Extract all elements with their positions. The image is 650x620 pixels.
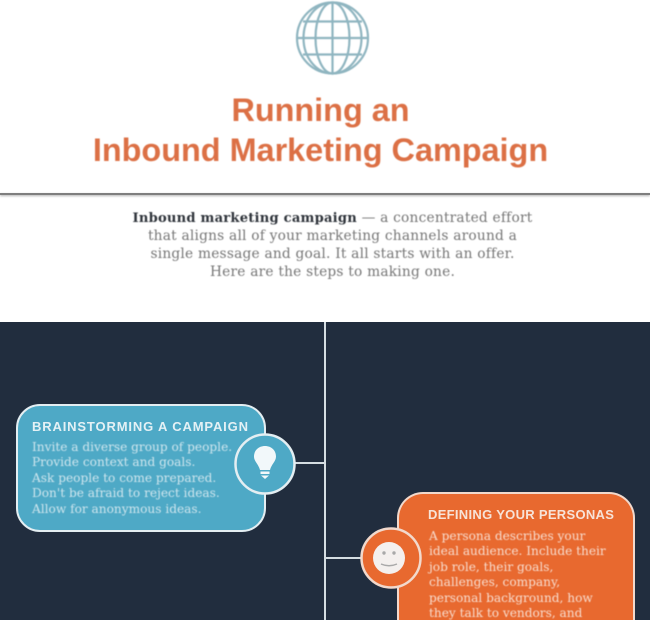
title: Running an: [231, 92, 410, 128]
header divider: [0, 193, 650, 195]
body text: brainstorming: [32, 440, 232, 516]
dark timeline panel: [0, 322, 650, 620]
body text: defining your personas: A persona describes your: [429, 529, 585, 543]
intro text: [132, 210, 533, 280]
heading: brainstorming: BRAINSTORMING A CAMPAIGN: [32, 419, 249, 434]
body text: defining your personas: personal background, how: [429, 591, 593, 605]
body text: defining your personas: job role, their goals,: [429, 560, 553, 574]
body text: brainstorming: Don't be afraid to reject ideas.: [32, 486, 220, 500]
body text: defining your personas: ideal audience. Include their: [429, 544, 606, 558]
body text: brainstorming: Invite a diverse group of people.: [32, 440, 232, 454]
icon: light bulb: [234, 433, 296, 495]
body text: brainstorming: Ask people to come prepared.: [32, 471, 216, 485]
intro text: Inbound marketing campaign — a concentrated effort: [132, 210, 532, 226]
connector: personas: [325, 557, 361, 559]
blue card: [16, 404, 266, 532]
panel: brainstorming a campaign: [16, 404, 296, 532]
intro text: Here are the steps to making one.: [210, 264, 455, 280]
title: Inbound Marketing Campaign: [93, 132, 548, 168]
connector: brainstorming: [294, 462, 325, 464]
icon: smiley: [360, 527, 422, 589]
body text: defining your personas: they talk to vendors, and: [429, 606, 582, 620]
body text: brainstorming: Allow for anonymous ideas.: [32, 502, 202, 516]
body text: defining your personas: [427, 529, 606, 620]
icon: globe: [295, 0, 370, 76]
title: [93, 92, 548, 168]
panel: defining your personas: [360, 492, 635, 620]
body text: defining your personas: challenges, company,: [429, 575, 560, 589]
body text: brainstorming: Provide context and goals.: [32, 455, 195, 469]
intro text: single message and goal. It all starts with an offer.: [150, 246, 515, 262]
orange card: [397, 492, 635, 620]
intro text: that aligns all of your marketing channels around a: [148, 228, 517, 244]
heading: defining your personas: DEFINING YOUR PERSONAS: [428, 507, 614, 522]
timeline vertical line: [324, 322, 326, 620]
